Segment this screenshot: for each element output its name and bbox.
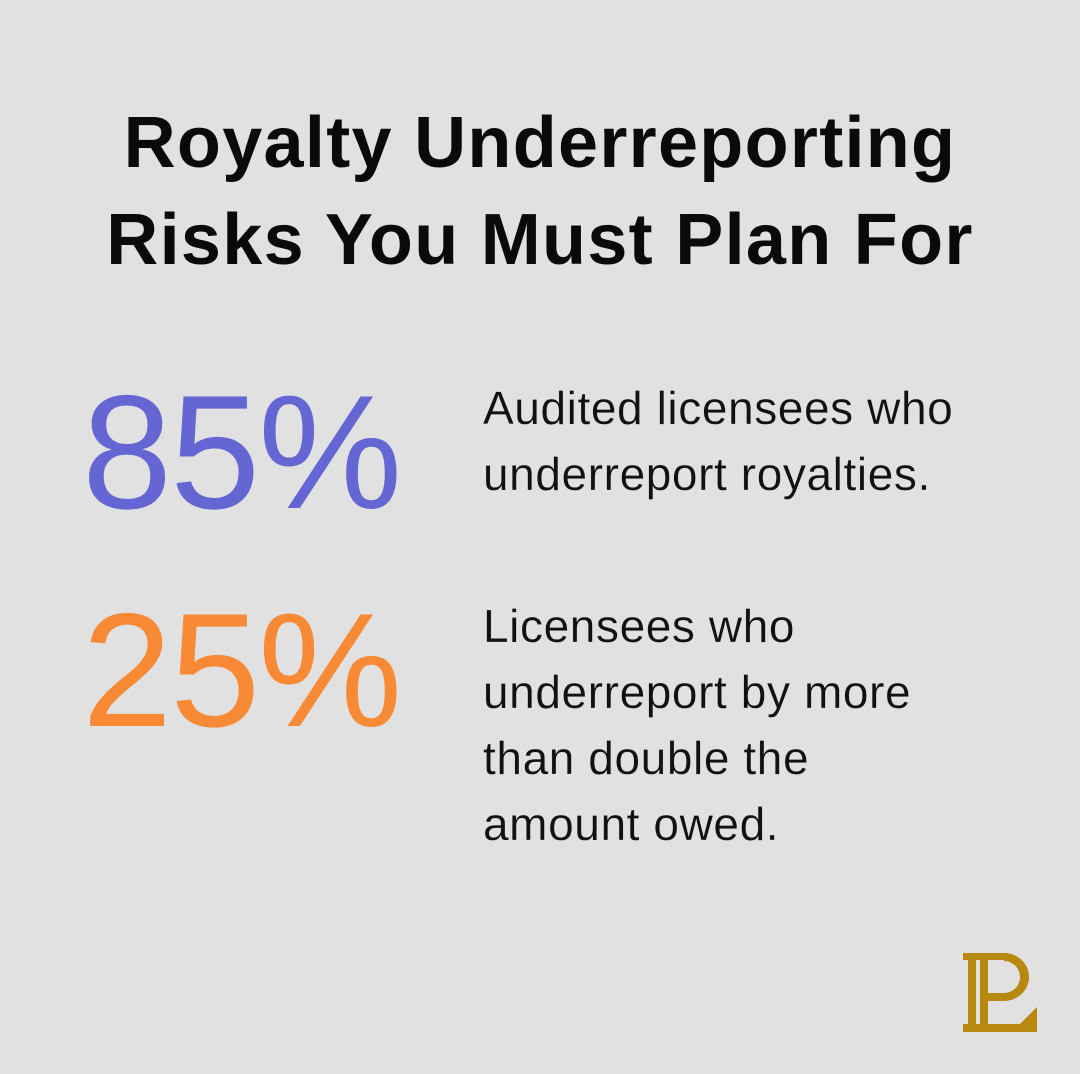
text: 25% description <box>483 600 911 850</box>
text: 25% description: than double the <box>483 732 809 784</box>
text: 85% description: Audited licensees who <box>483 382 953 434</box>
icon: logo <box>963 953 1037 1032</box>
text: 25% description: Licensees who <box>483 600 795 652</box>
stat: 85%: 85% <box>82 362 400 543</box>
stat: 25%: 25% <box>82 580 400 761</box>
text: 85% description: underreport royalties. <box>483 448 931 500</box>
text: 85% description <box>483 382 953 500</box>
title <box>106 103 974 280</box>
title: Risks You Must Plan For <box>106 200 974 280</box>
title: Royalty Underreporting <box>124 103 956 183</box>
text: 25% description: amount owed. <box>483 798 779 850</box>
text: 25% description: underreport by more <box>483 666 911 718</box>
